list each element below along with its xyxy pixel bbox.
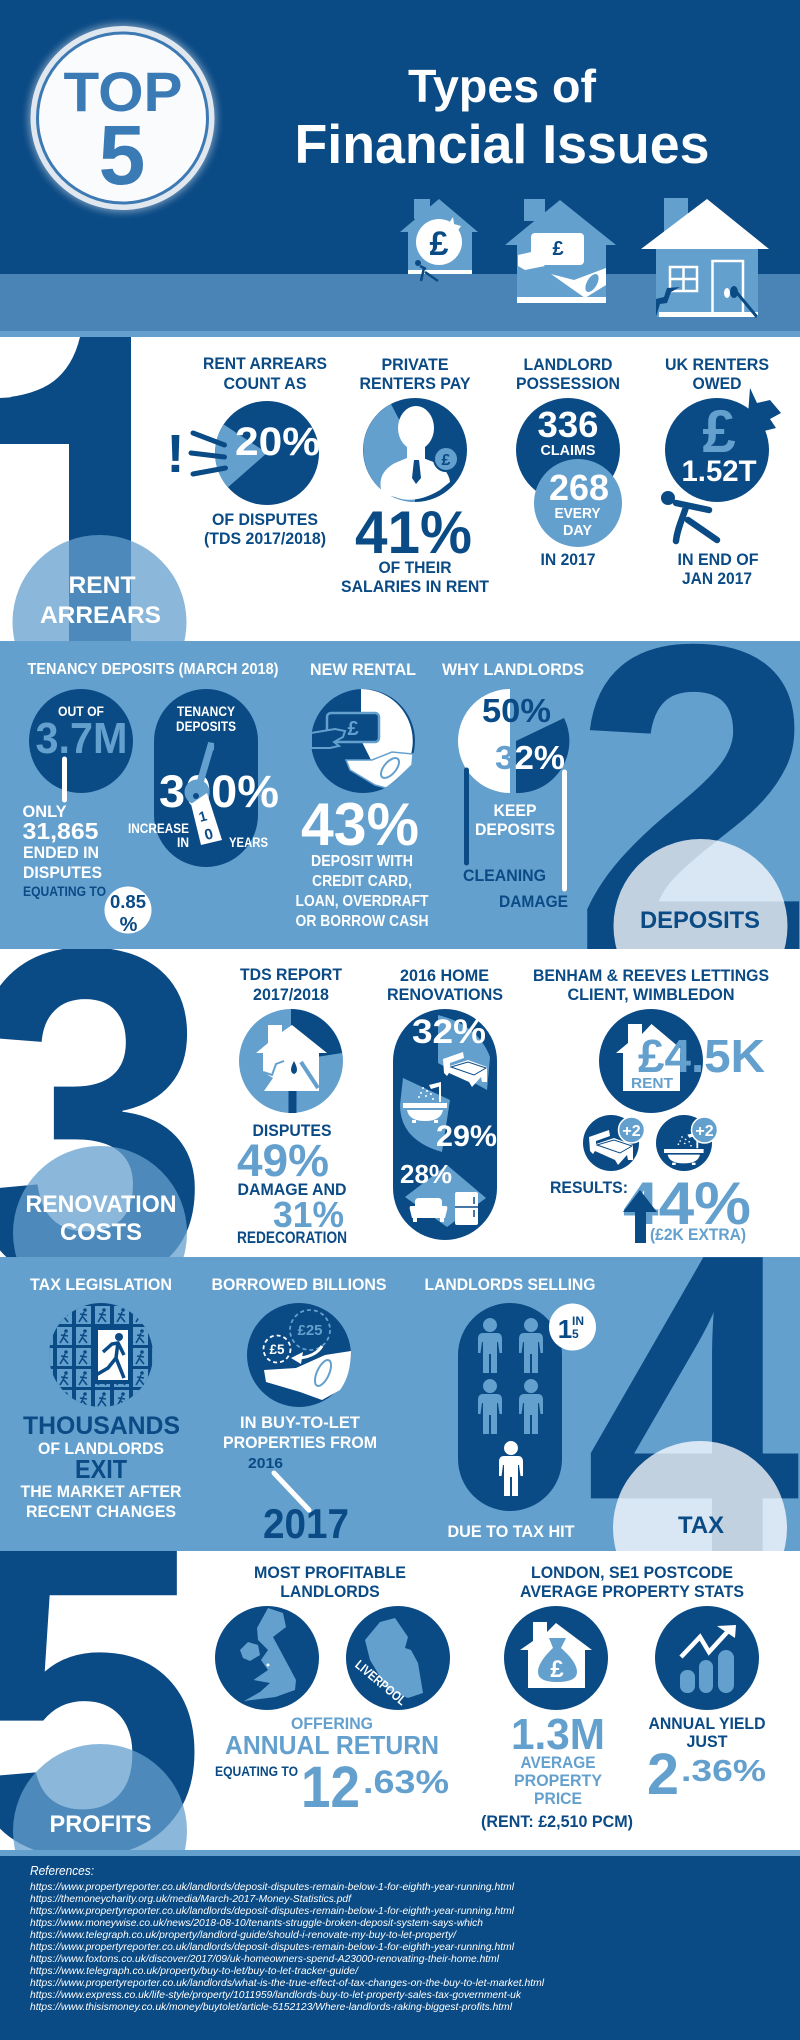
section label: renovation costs <box>13 1146 187 1257</box>
stat: landlord possession: 336 <box>538 404 598 445</box>
stat: landlord possession: EVERY <box>554 505 600 522</box>
stat: 3.7M deposits in disputes: 0.85 <box>110 892 146 912</box>
stat: London SE1 property: PRICE <box>534 1790 582 1808</box>
stat: 2016 home renovations: RENOVATIONS <box>387 986 503 1004</box>
stat: new rental deposit: NEW RENTAL <box>310 661 416 679</box>
stat: 2016 home renovations <box>387 967 503 1240</box>
stat: tenancy deposits increase: 300% <box>159 766 279 817</box>
stat: new rental deposit: 43% <box>301 791 419 858</box>
stat: new rental deposit: CREDIT CARD, <box>312 873 412 890</box>
stat: 2016 home renovations: 32% <box>412 1013 486 1051</box>
stat: landlords selling <box>424 1276 596 1541</box>
icon: damaged house <box>641 198 769 317</box>
stat: tax legislation: OF LANDLORDS <box>38 1439 164 1458</box>
stat: borrowed billions: IN BUY-TO-LET <box>240 1414 360 1432</box>
stat: Benham and Reeves client: (£2K EXTRA) <box>650 1226 746 1244</box>
numeral 4: 4 <box>585 1162 800 1653</box>
stat: 3.7M deposits in disputes: % <box>120 914 138 936</box>
stat: landlords selling: IN <box>572 1314 584 1328</box>
badge: top 5 <box>28 24 216 212</box>
stat: London SE1 property: 1.3M <box>511 1710 605 1759</box>
stat: TDS report disputes: TDS REPORT <box>240 966 342 984</box>
stat: landlord possession: CLAIMS <box>540 442 596 459</box>
stat: new rental deposit: £ <box>347 718 359 740</box>
section label: profits: PROFITS <box>50 1811 152 1838</box>
stat: London SE1 property: ANNUAL YIELD <box>648 1715 766 1733</box>
stat: UK renters owed: JAN 2017 <box>682 570 752 588</box>
stat: why landlords keep deposits: DAMAGE <box>499 892 568 911</box>
section label: rent arrears: RENT <box>68 572 136 599</box>
stat: tax legislation: THOUSANDS <box>23 1412 180 1440</box>
icon: house with deposit note: £ <box>552 238 564 260</box>
stat: most profitable landlords: OFFERING <box>291 1715 373 1733</box>
stat: TDS report disputes: REDECORATION <box>237 1229 347 1247</box>
stat: private renters pay: OF THEIR <box>378 559 452 577</box>
stat: borrowed billions: £25 <box>297 1322 323 1339</box>
stat: why landlords keep deposits: 32% <box>495 739 565 776</box>
stat: London SE1 property: (RENT: £2,510 PCM) <box>481 1813 633 1831</box>
references footer: https://www.propertyreporter.co.uk/landlords/deposit-disputes-remain-below-1-for-eighth-year-running.html <box>30 1941 515 1953</box>
panel: 3 renovation costs <box>0 949 768 1257</box>
stat: private renters pay: PRIVATE <box>382 356 448 374</box>
stat: 3.7M deposits in disputes: 3.7M <box>36 714 128 763</box>
stat: London SE1 property <box>481 1564 766 1831</box>
stat: London SE1 property: .36% <box>681 1753 766 1788</box>
stat: private renters pay: £ <box>442 452 451 469</box>
references footer: https://www.express.co.uk/life-style/property/1011959/landlords-buy-to-let-property-sales-tax-government-uk <box>30 1989 522 2001</box>
stat: Benham and Reeves client: RESULTS: <box>550 1178 628 1197</box>
stat: new rental deposit: DEPOSIT WITH <box>311 853 413 870</box>
section label: renovation costs: RENOVATION <box>26 1191 176 1218</box>
section label: tax: TAX <box>678 1512 724 1539</box>
stat: 2016 home renovations: 2016 HOME <box>400 967 489 985</box>
section label: tax <box>613 1441 787 1551</box>
stat: tenancy deposits increase <box>128 689 279 867</box>
section label: rent arrears <box>12 535 186 641</box>
stat: London SE1 property: LONDON, SE1 POSTCODE <box>531 1564 733 1582</box>
icon: house with runner carrying debt: £ <box>430 225 449 263</box>
stat: why landlords keep deposits: WHY LANDLORDS <box>442 661 584 679</box>
stat: London SE1 property: 2 <box>647 1742 679 1807</box>
stat: borrowed billions: £5 <box>269 1342 285 1357</box>
stat: borrowed billions: PROPERTIES FROM <box>223 1434 377 1452</box>
stat: TDS report disputes: 2017/2018 <box>253 986 329 1004</box>
references footer: https://themoneycharity.org.uk/media/March-2017-Money-Statistics.pdf <box>30 1893 352 1905</box>
section label: rent arrears: ARREARS <box>40 602 161 629</box>
title <box>294 60 710 175</box>
stat: borrowed billions: 2017 <box>263 1500 349 1547</box>
stat: tenancy deposits increase: YEARS <box>229 835 268 850</box>
stat: 2016 home renovations: 28% <box>400 1159 452 1189</box>
panel: 4 tax <box>0 1257 800 1551</box>
badge: top 5: TOP <box>64 60 182 123</box>
icon: house with deposit note <box>505 199 616 303</box>
stat: private renters pay: 41% <box>355 499 472 566</box>
stat: landlord possession: LANDLORD <box>524 356 613 374</box>
stat: landlords selling: LANDLORDS SELLING <box>424 1276 596 1294</box>
stat: rent arrears disputes <box>167 355 327 548</box>
stat: landlords selling: DUE TO TAX HIT <box>448 1523 574 1541</box>
badge: top 5: 5 <box>99 108 145 202</box>
stat: borrowed billions <box>212 1276 386 1547</box>
stat: London SE1 property: £ <box>550 1656 564 1683</box>
stat: 3.7M deposits in disputes: EQUATING TO <box>23 883 106 899</box>
stat: rent arrears disputes: COUNT AS <box>224 375 306 393</box>
references footer: https://www.propertyreporter.co.uk/landlords/deposit-disputes-remain-below-1-for-eighth-year-running.html <box>30 1905 515 1917</box>
stat: tenancy deposits increase: TENANCY <box>177 704 235 719</box>
stat: TDS report disputes: 49% <box>237 1135 329 1186</box>
stat: TDS report disputes: 31% <box>273 1194 344 1235</box>
numeral 1 <box>0 337 131 641</box>
references footer: References: <box>30 1863 94 1878</box>
references footer: https://www.telegraph.co.uk/property/buy-to-let/buy-to-let-tracker-guide/ <box>30 1965 359 1977</box>
stat: 3.7M deposits in disputes: ONLY <box>22 802 67 821</box>
stat: tenancy deposits heading: TENANCY DEPOSITS (MARCH 2018) <box>28 661 278 678</box>
panel: 1 rent arrears <box>0 337 781 641</box>
stat: tax legislation: THE MARKET AFTER <box>20 1482 182 1501</box>
stat: tenancy deposits increase: 0 <box>203 825 215 844</box>
stat: most profitable landlords <box>215 1564 450 1820</box>
references footer: https://www.propertyreporter.co.uk/landlords/deposit-disputes-remain-below-1-for-eighth-year-running.html <box>30 1881 515 1893</box>
stat: Benham and Reeves client <box>533 967 769 1244</box>
stat: 3.7M deposits in disputes: ENDED IN <box>23 843 99 862</box>
panel: 2 deposits <box>0 641 800 949</box>
stat: 3.7M deposits in disputes: 31,865 <box>22 818 99 844</box>
stat: tax legislation: EXIT <box>75 1454 127 1484</box>
stat: borrowed billions: 2016 <box>248 1455 283 1472</box>
stat: most profitable landlords: MOST PROFITABLE <box>254 1564 406 1582</box>
header panel <box>0 0 800 337</box>
stat: Benham and Reeves client: CLIENT, WIMBLEDON <box>568 986 734 1004</box>
stat: most profitable landlords: ANNUAL RETURN <box>225 1730 439 1760</box>
stat: Benham and Reeves client: £4.5K <box>638 1030 765 1082</box>
stat: tenancy deposits increase: IN <box>177 835 189 850</box>
stat: Benham and Reeves client: +2 <box>622 1123 641 1140</box>
stat: rent arrears disputes: 20% <box>235 420 320 464</box>
stat: new rental deposit: LOAN, OVERDRAFT <box>296 893 429 910</box>
stat: private renters pay <box>341 356 489 596</box>
stat: landlords selling: 5 <box>572 1327 579 1341</box>
stat: Benham and Reeves client: BENHAM & REEVES LETTINGS <box>533 967 769 985</box>
stat: why landlords keep deposits: 50% <box>482 692 551 729</box>
references footer: https://www.thisismoney.co.uk/money/buytolet/article-5152123/Where-landlords-raking-biggest-profits.html <box>30 2001 513 2013</box>
stat: rent arrears disputes: (TDS 2017/2018) <box>204 530 326 548</box>
stat: landlord possession <box>516 356 622 569</box>
stat: UK renters owed: £ <box>702 398 736 465</box>
stat: London SE1 property: AVERAGE <box>520 1754 596 1772</box>
stat: tenancy deposits increase: DEPOSITS <box>176 719 236 734</box>
title: Financial Issues <box>294 113 710 175</box>
stat: landlord possession: DAY <box>563 522 592 539</box>
stat: TDS report disputes: DISPUTES <box>252 1122 332 1140</box>
icon: house with runner carrying debt <box>400 199 478 281</box>
stat: UK renters owed: 1.52T <box>682 455 756 488</box>
stat: borrowed billions: BORROWED BILLIONS <box>212 1276 386 1294</box>
stat: rent arrears disputes: OF DISPUTES <box>212 511 318 529</box>
stat: most profitable landlords: .63% <box>363 1764 449 1800</box>
stat: 3.7M deposits in disputes <box>22 689 152 936</box>
section label: deposits <box>614 839 788 949</box>
stat: most profitable landlords: LIVERPOOL <box>352 1657 409 1708</box>
stat: why landlords keep deposits: CLEANING <box>463 866 546 885</box>
references footer: https://www.moneywise.co.uk/news/2018-08-10/tenants-struggle-broken-deposit-system-says-which <box>30 1917 483 1929</box>
stat: private renters pay: SALARIES IN RENT <box>341 578 489 596</box>
stat: UK renters owed: OWED <box>692 375 742 393</box>
stat: private renters pay: RENTERS PAY <box>360 375 470 393</box>
stat: rent arrears disputes: RENT ARREARS <box>203 355 327 373</box>
stat: most profitable landlords: EQUATING TO <box>215 1763 298 1779</box>
stat: tenancy deposits increase: 1 <box>197 807 209 825</box>
stat: Benham and Reeves client: +2 <box>695 1123 714 1140</box>
stat: new rental deposit <box>296 661 429 930</box>
stat: London SE1 property: PROPERTY <box>514 1772 602 1790</box>
references footer: https://www.foxtons.co.uk/discover/2017/09/uk-homeowners-spend-A23000-renovating-their-home.html <box>30 1953 500 1965</box>
panel: 5 profits <box>0 1551 766 1850</box>
references footer <box>0 1850 800 2040</box>
stat: 2016 home renovations: 29% <box>436 1120 497 1153</box>
stat: why landlords keep deposits: KEEP <box>494 801 536 820</box>
stat: why landlords keep deposits: DEPOSITS <box>475 820 555 839</box>
stat: most profitable landlords: 12 <box>301 1755 360 1820</box>
section label: deposits: DEPOSITS <box>640 907 760 934</box>
section label: profits <box>13 1744 187 1850</box>
stat: London SE1 property: JUST <box>686 1733 728 1751</box>
stat: tenancy deposits increase: INCREASE <box>128 821 189 836</box>
stat: most profitable landlords: LANDLORDS <box>280 1583 380 1601</box>
stat: landlord possession: POSSESSION <box>516 375 620 393</box>
stat: 3.7M deposits in disputes: OUT OF <box>58 704 104 719</box>
stat: why landlords keep deposits <box>442 661 584 911</box>
stat: Benham and Reeves client: 44% <box>623 1170 751 1237</box>
references footer: https://www.propertyreporter.co.uk/landlords/what-is-the-true-effect-of-tax-changes-on-the-buy-to-let-market.html <box>30 1977 545 1989</box>
title: Types of <box>408 60 597 112</box>
stat: landlord possession: 268 <box>549 467 609 508</box>
references footer: https://www.telegraph.co.uk/property/landlord-guide/should-i-renovate-my-buy-to-let-property/ <box>30 1929 457 1941</box>
stat: London SE1 property: AVERAGE PROPERTY STATS <box>520 1583 744 1601</box>
stat: 3.7M deposits in disputes: DISPUTES <box>23 863 102 882</box>
stat: TDS report disputes: DAMAGE AND <box>238 1181 347 1199</box>
stat: UK renters owed: UK RENTERS <box>665 356 769 374</box>
stat: UK renters owed: IN END OF <box>678 551 758 569</box>
stat: Benham and Reeves client: RENT <box>631 1075 673 1092</box>
section label: renovation costs: COSTS <box>60 1219 142 1246</box>
stat: tax legislation <box>20 1276 182 1521</box>
stat: tax legislation: RECENT CHANGES <box>26 1502 176 1521</box>
stat: UK renters owed <box>661 356 781 588</box>
stat: landlords selling: 1 <box>558 1314 572 1344</box>
stat: new rental deposit: OR BORROW CASH <box>296 913 428 930</box>
stat: TDS report disputes <box>237 966 347 1247</box>
stat: rent arrears disputes: ! <box>167 424 184 484</box>
stat: landlord possession: IN 2017 <box>540 551 596 569</box>
stat: tax legislation: TAX LEGISLATION <box>30 1276 172 1294</box>
